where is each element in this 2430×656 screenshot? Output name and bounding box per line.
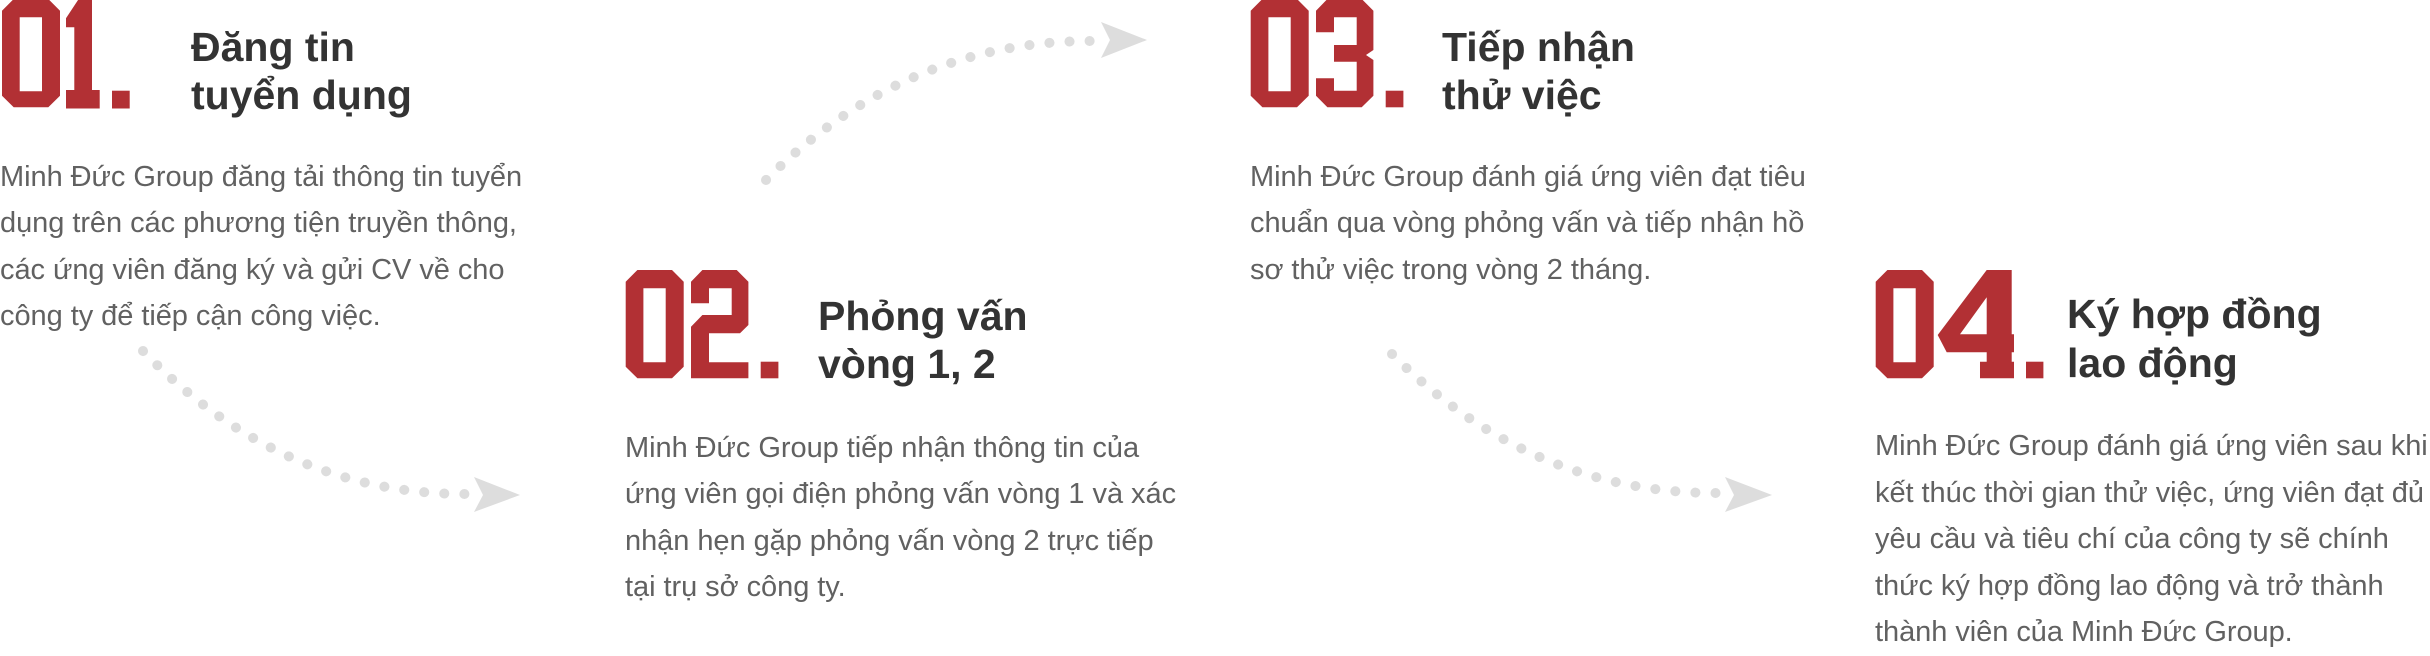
text: step 4 description: Minh Đức Group đánh giá ứng viên sau khi xyxy=(1875,430,2428,462)
arrow: step 1 to 2 xyxy=(143,351,520,512)
text: step 3 description: Minh Đức Group đánh giá ứng viên đạt tiêu xyxy=(1250,160,1806,192)
title: step 2 xyxy=(818,292,1028,387)
text: step 2 description: Minh Đức Group tiếp nhận thông tin của xyxy=(625,432,1139,464)
text: step 2 description: ứng viên gọi điện phỏng vấn vòng 1 và xác xyxy=(625,478,1176,510)
arrow: step 3 to 4 xyxy=(1392,354,1772,512)
title: step 3 xyxy=(1442,24,1635,118)
text: step 2 description: nhận hẹn gặp phỏng vấn vòng 2 trực tiếp xyxy=(625,524,1154,556)
title: step 1: tuyển dụng xyxy=(191,72,412,118)
text: step 4 description: thức ký hợp đồng lao động và trở thành xyxy=(1875,570,2384,602)
text: step 1 description: dụng trên các phương tiện truyền thông, xyxy=(0,207,517,239)
text: step 3 description xyxy=(1250,160,1806,286)
text: step 2 description xyxy=(625,432,1176,603)
text: step 4 description: thành viên của Minh Đức Group. xyxy=(1875,616,2293,648)
title: step 2: Phỏng vấn xyxy=(818,292,1028,338)
text: step 4 description: kết thúc thời gian thử việc, ứng viên đạt đủ xyxy=(1875,476,2424,508)
number 02 xyxy=(626,270,778,378)
title: step 3: thử việc xyxy=(1442,72,1602,118)
text: step 2 description: tại trụ sở công ty. xyxy=(625,571,846,603)
text: step 1 description: Minh Đức Group đăng tải thông tin tuyển xyxy=(0,160,522,192)
title: step 3: Tiếp nhận xyxy=(1442,24,1635,70)
text: step 4 description: yêu cầu và tiêu chí của công ty sẽ chính xyxy=(1875,523,2389,555)
number 04 xyxy=(1876,270,2043,378)
title: step 4 xyxy=(2067,291,2322,386)
text: step 1 description: công ty để tiếp cận công việc. xyxy=(0,300,381,332)
title: step 4: Ký hợp đồng xyxy=(2067,291,2322,337)
text: step 1 description: các ứng viên đăng ký và gửi CV về cho xyxy=(0,254,504,286)
text: step 3 description: chuẩn qua vòng phỏng vấn và tiếp nhận hồ xyxy=(1250,207,1804,239)
arrow: step 2 to 3 xyxy=(766,22,1147,180)
number 03 xyxy=(1251,0,1403,107)
title: step 2: vòng 1, 2 xyxy=(818,341,996,387)
text: step 4 description xyxy=(1875,430,2428,648)
number 01 xyxy=(2,0,130,108)
title: step 1 xyxy=(191,24,412,118)
text: step 1 description xyxy=(0,160,522,332)
text: step 3 description: sơ thử việc trong vòng 2 tháng. xyxy=(1250,254,1651,286)
title: step 4: lao động xyxy=(2067,340,2238,386)
title: step 1: Đăng tin xyxy=(191,24,355,70)
